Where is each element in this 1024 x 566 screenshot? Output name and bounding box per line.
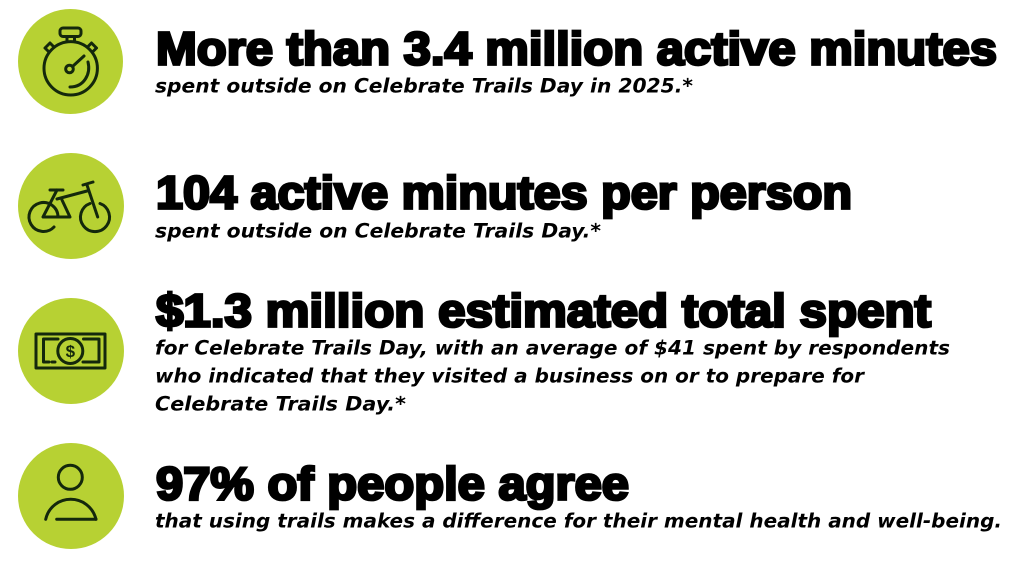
icon: dollar bill bbox=[18, 298, 124, 404]
heading: $1.3 million total spent: $1.3 million estimated total spent bbox=[156, 284, 931, 336]
subtext: mental health: that using trails makes a difference for their mental health and well-being. bbox=[155, 510, 1002, 532]
subtext: spending explanation: who indicated that they visited a business on or to prepare for bbox=[155, 364, 865, 388]
subtext: spent outside in 2025: spent outside on Celebrate Trails Day in 2025.* bbox=[155, 74, 693, 98]
heading: 97% agree: 97% of people agree bbox=[156, 458, 629, 510]
panel: mental health stat bbox=[18, 443, 1002, 549]
heading: 104 active minutes per person: 104 active minutes per person bbox=[156, 166, 852, 218]
subtext: spending explanation: Celebrate Trails Day.* bbox=[155, 392, 406, 416]
panel: estimated spending stat bbox=[18, 284, 950, 416]
icon: bicycle bbox=[18, 153, 124, 259]
panel: minutes per person stat bbox=[18, 153, 852, 259]
icon: person bbox=[18, 443, 124, 549]
subtext: spending explanation bbox=[155, 336, 950, 416]
icon: stopwatch bbox=[18, 9, 123, 114]
heading: 3.4 million active minutes: More than 3.4 million active minutes bbox=[156, 22, 997, 74]
icon glyph: dollar sign: $ bbox=[66, 342, 76, 361]
subtext: spent outside: spent outside on Celebrate Trails Day.* bbox=[155, 220, 601, 242]
subtext: spending explanation: for Celebrate Trails Day, with an average of $41 spent by respondents bbox=[155, 336, 950, 360]
panel: active minutes stat bbox=[18, 9, 997, 114]
